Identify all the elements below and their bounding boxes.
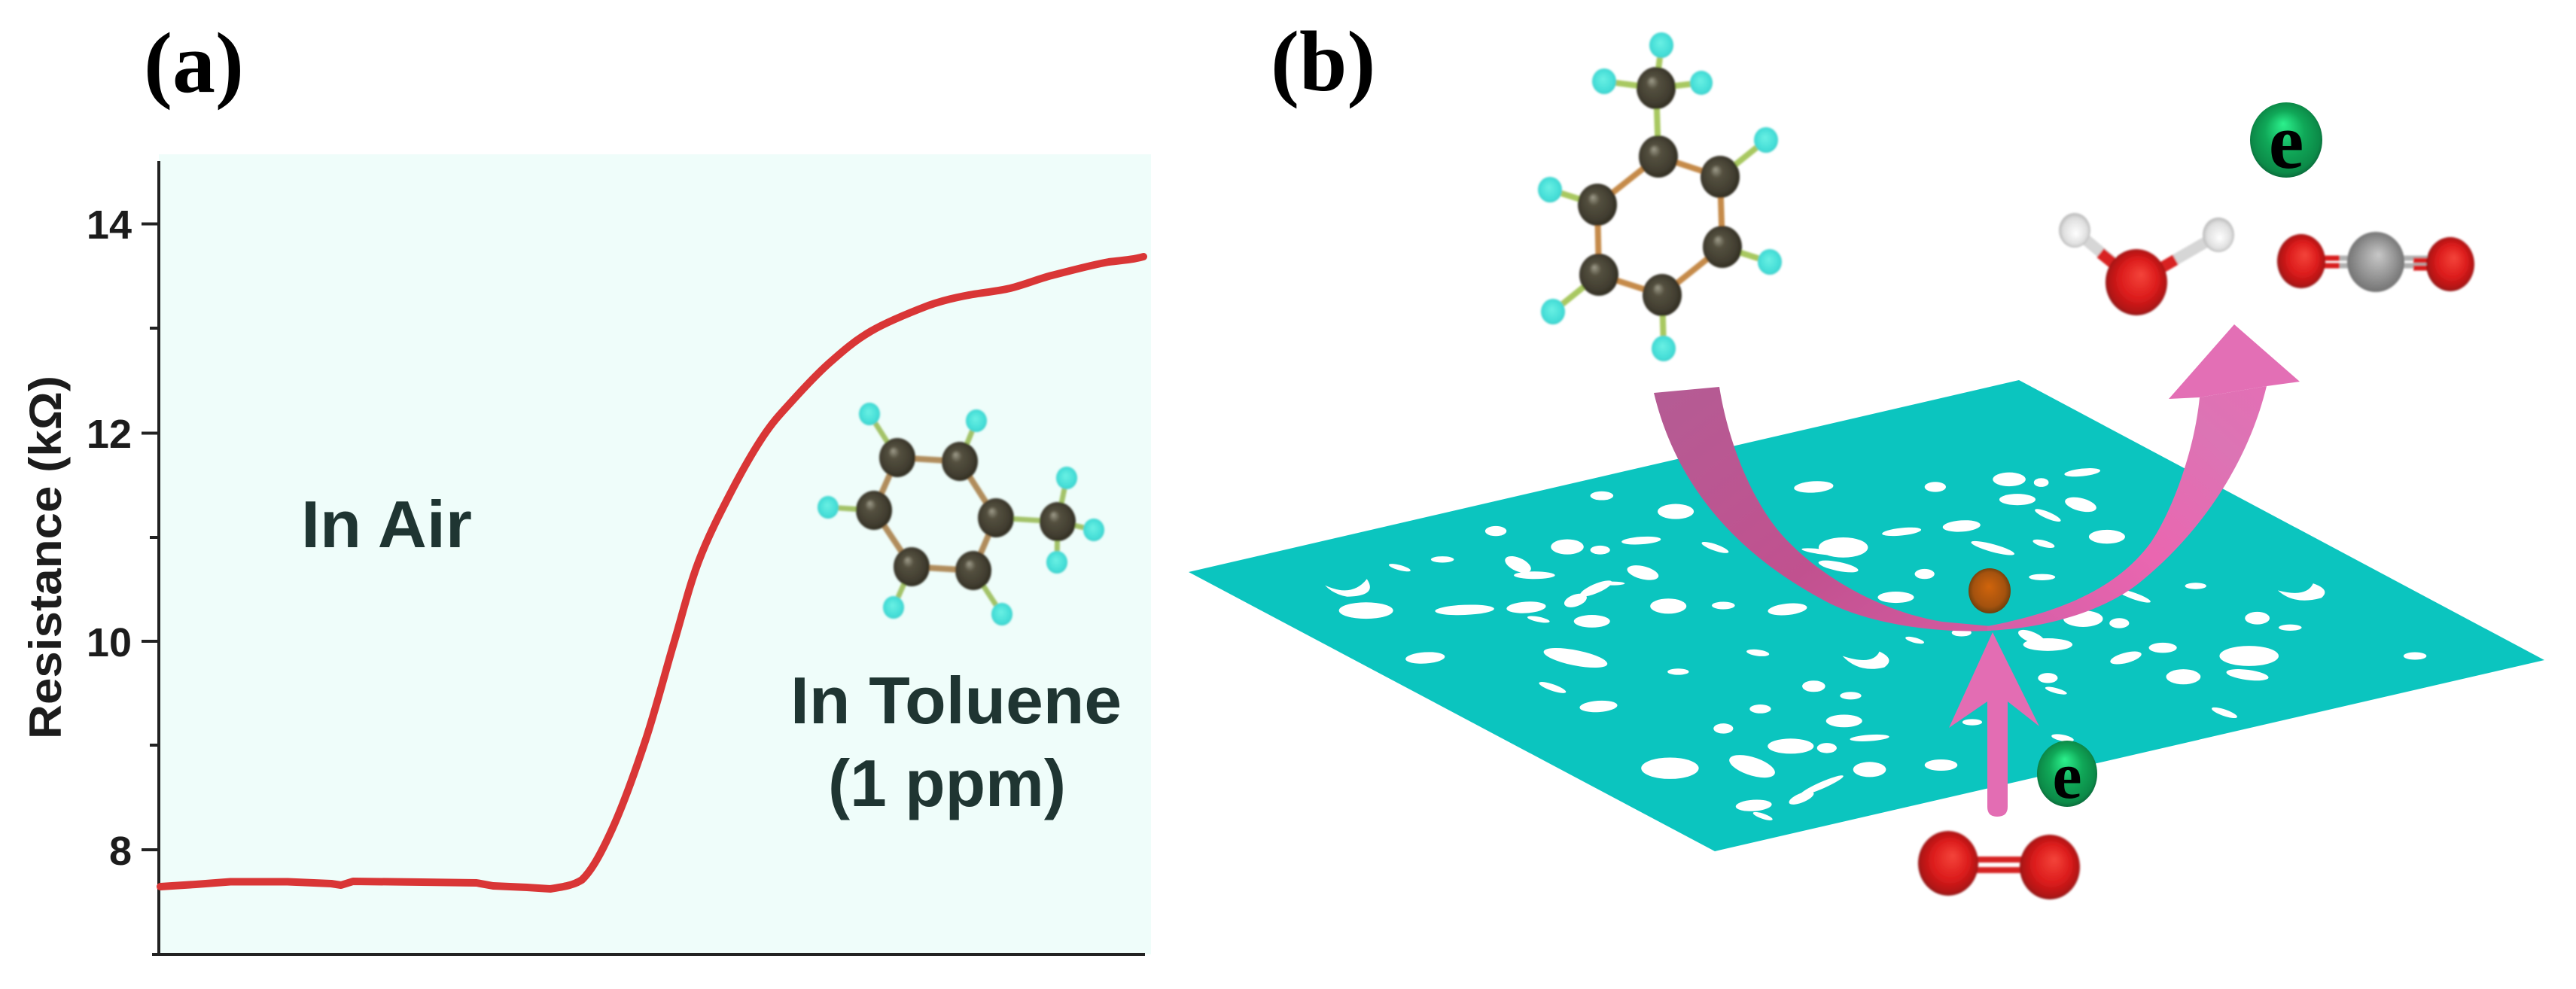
chart background: [159, 154, 1151, 954]
panel: resistance chart (a): [20, 15, 1151, 954]
panel: reaction mechanism (b): [1189, 14, 2544, 899]
y-axis tick labels: [87, 202, 132, 874]
icon: carbon dioxide molecule: [2277, 232, 2474, 292]
arrow: toluene adsorption curving down to surface: [1654, 387, 1991, 631]
icon: electron captured: [2037, 740, 2097, 813]
y-axis tick labels: 14: [87, 202, 132, 248]
icon: electron captured: e: [2052, 740, 2082, 813]
panel label (a): (a): [144, 15, 244, 111]
label: In Toluene (1 ppm): (1 ppm): [828, 746, 1066, 820]
y-axis title: Resistance (kΩ): [20, 376, 71, 739]
label: In Toluene (1 ppm): In Toluene: [790, 663, 1122, 738]
y-axis tick labels: 10: [87, 620, 132, 665]
icon: toluene molecule: [818, 403, 1104, 625]
label: In Toluene (1 ppm): [790, 663, 1122, 820]
icon: toluene molecule above sheet: [1538, 32, 1782, 361]
icon: electron released: [2250, 97, 2322, 185]
axes with ticks: [142, 161, 1145, 954]
y-axis tick labels: 12: [87, 412, 132, 457]
panel label (b): (b): [1271, 14, 1375, 109]
sensing layer sheet with white flakes: [1189, 380, 2544, 851]
icon: oxygen molecule: [1918, 831, 2080, 899]
icon: water molecule: [2059, 213, 2234, 315]
y-axis tick labels: 8: [109, 829, 132, 874]
resistance curve: [160, 257, 1143, 889]
arrow: products leaving the surface: [1987, 324, 2300, 631]
icon: brown active-site atom: [1969, 568, 2011, 613]
icon: electron released: e: [2269, 97, 2303, 185]
label: In Air: In Air: [301, 487, 472, 561]
arrow: oxygen rising to surface: [1949, 632, 2039, 817]
